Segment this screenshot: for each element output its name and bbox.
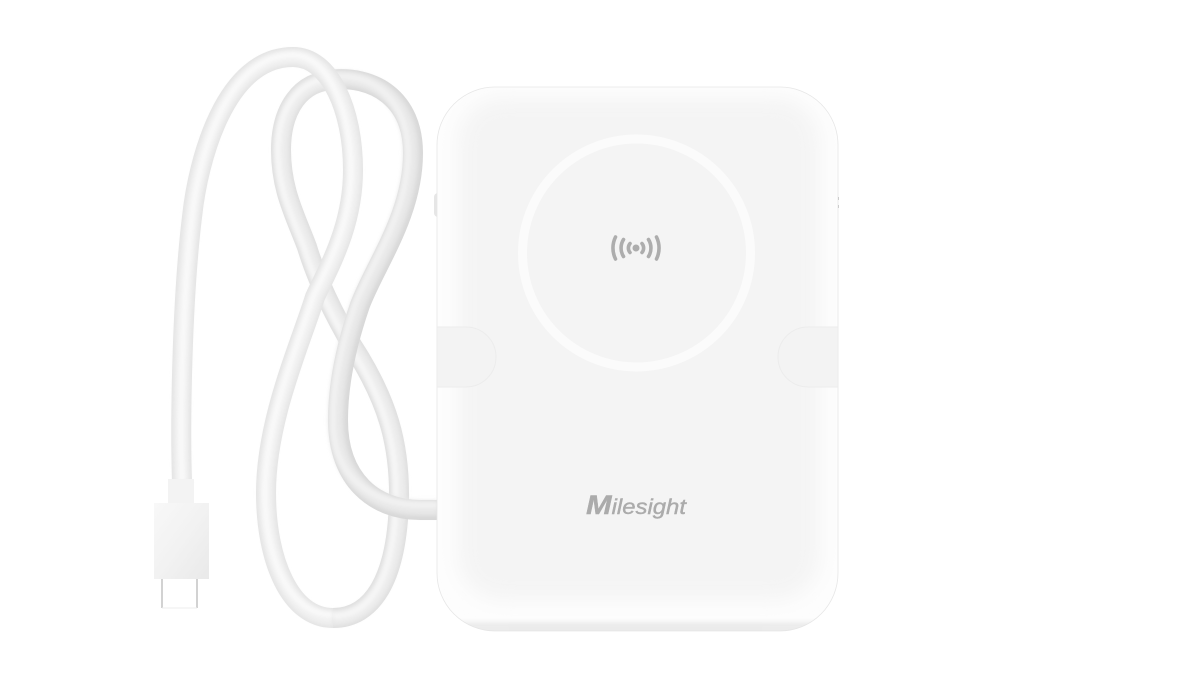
connector plug <box>161 579 197 608</box>
cable: strand from connector (front layer) <box>181 55 353 618</box>
product illustration <box>154 47 839 632</box>
icon: wireless signal <box>613 237 659 259</box>
left notch <box>438 326 482 388</box>
USB-C connector <box>154 479 209 608</box>
wireless charging ring <box>522 139 750 367</box>
cable: middle strand (back layer) <box>278 78 399 618</box>
device face <box>472 112 806 586</box>
connector collar <box>168 479 194 503</box>
device body <box>437 87 838 640</box>
side marks <box>838 197 840 208</box>
cable <box>181 55 438 618</box>
right notch <box>796 326 838 388</box>
cable: strand running to the device <box>328 76 438 510</box>
logo: Milesight: Milesight <box>586 490 687 520</box>
connector body <box>154 503 209 579</box>
side button <box>434 193 442 217</box>
